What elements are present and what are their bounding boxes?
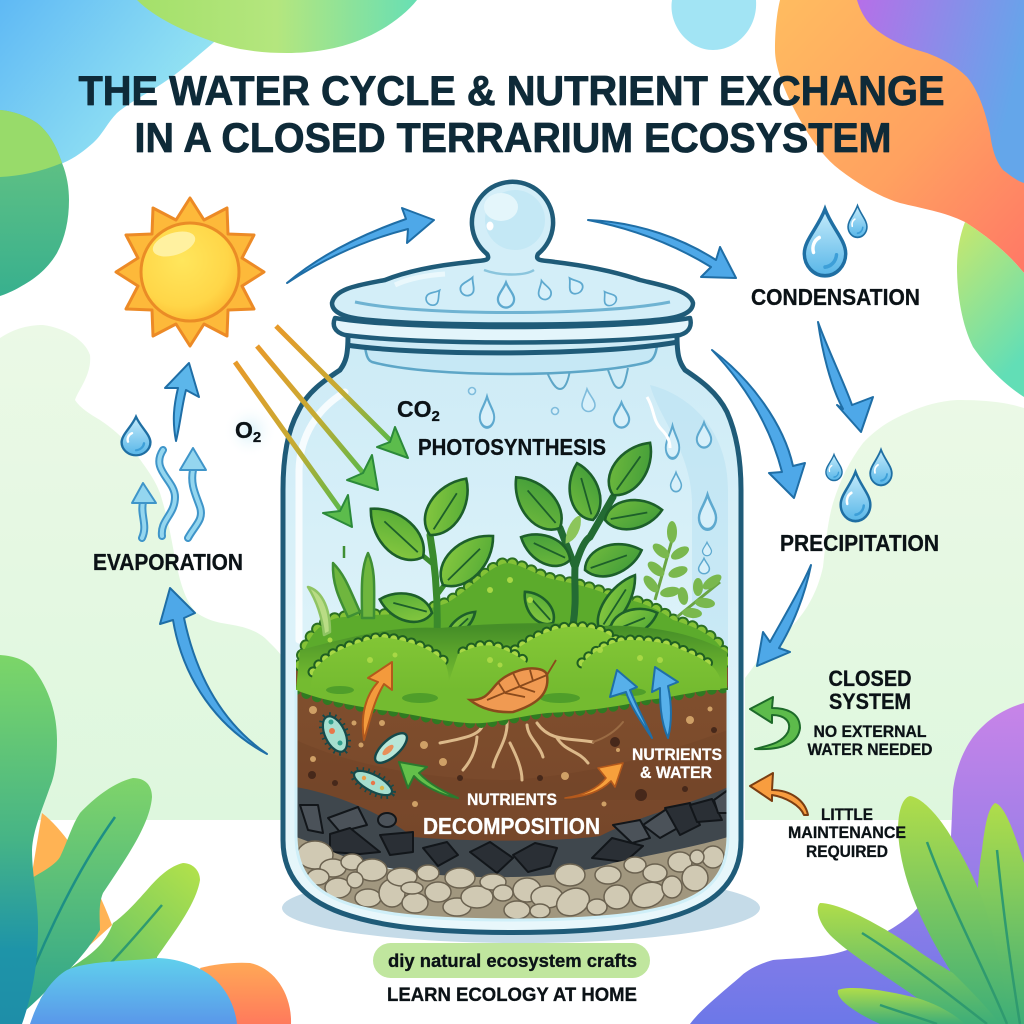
blob: top small cyan	[671, 0, 756, 50]
moss base	[296, 623, 727, 723]
moss lump left	[308, 632, 449, 678]
plant: fern	[641, 521, 724, 619]
microbe b	[370, 728, 412, 768]
blob: left green	[0, 110, 69, 296]
callout: little maintenance: MAINTENANCE	[788, 823, 906, 842]
moss lower texture	[326, 686, 646, 703]
drips under rim	[546, 368, 628, 389]
label: CO2: 2	[432, 408, 440, 425]
lid band	[334, 318, 691, 342]
arrow: little maintenance	[750, 773, 808, 815]
callout: little maintenance: LITTLE	[821, 805, 873, 824]
terrarium jar	[283, 182, 741, 932]
plant: grasses left	[308, 546, 374, 635]
callout: closed system: SYSTEM	[829, 689, 911, 714]
blob: right green	[957, 222, 1024, 397]
moss front	[296, 577, 728, 723]
arrow: blue nutrients up right	[652, 667, 678, 738]
label: photosynthesis: PHOTOSYNTHESIS	[418, 434, 606, 460]
label: decomposition: DECOMPOSITION	[423, 813, 600, 839]
blob: bottom left orange	[30, 813, 112, 945]
halo: O2	[223, 404, 277, 458]
callout: closed system: CLOSED	[828, 666, 912, 691]
arrow: orange to nutrients	[565, 763, 623, 798]
moss rear bumps dark	[300, 563, 727, 665]
callout: little maintenance: REQUIRED	[806, 842, 888, 861]
plant: left seedling	[358, 469, 504, 641]
panel: pale green right	[745, 400, 1024, 820]
arrow: precipitation to jar	[757, 565, 811, 666]
title	[78, 67, 944, 161]
roots	[440, 722, 623, 780]
lid drops	[424, 286, 444, 308]
moss rear bumps light	[300, 563, 727, 665]
charcoal chunks	[300, 790, 728, 873]
arrow: closed system loop	[750, 697, 800, 749]
arrow: sunlight 3	[235, 362, 352, 527]
blob: top left blue	[0, 0, 245, 185]
jar outline	[283, 335, 741, 932]
label: nutrients and water: NUTRIENTS	[632, 745, 722, 764]
jar shadow	[282, 873, 760, 943]
moss lump right middle	[510, 621, 620, 676]
jar body glass	[283, 335, 741, 932]
jar contents	[296, 563, 728, 925]
microbes	[317, 711, 412, 801]
soil layer	[296, 660, 728, 850]
plant: right sapling	[503, 433, 664, 643]
soil dark patch	[296, 730, 728, 800]
knob shine	[485, 190, 545, 250]
fallen leaf	[470, 660, 556, 712]
arrow: orange up	[363, 662, 392, 740]
jar inner base rim	[296, 690, 728, 920]
microbe a	[317, 711, 353, 757]
label: nutrients and water	[632, 745, 722, 782]
moss base underside	[296, 688, 728, 723]
title: IN A CLOSED TERRARIUM ECOSYSTEM	[134, 114, 892, 161]
label: precipitation: PRECIPITATION	[780, 530, 939, 556]
gravel bed	[296, 837, 728, 925]
moss highlights	[328, 577, 663, 668]
lid inner lines	[355, 302, 670, 312]
blob: bottom right purple	[690, 703, 1024, 1024]
icon: sun	[116, 198, 264, 346]
footer pill	[373, 943, 650, 978]
lid	[332, 182, 693, 342]
callout: closed system	[808, 666, 932, 759]
jar inner droplets	[468, 388, 716, 574]
icon: vapour arrows	[132, 448, 206, 538]
blob: top right orange	[775, 0, 1024, 273]
arrow: sun to lid	[287, 208, 434, 283]
moss lump far right	[580, 640, 721, 690]
label: evaporation: EVAPORATION	[93, 549, 243, 575]
label: CO2: CO	[397, 396, 432, 422]
arrow: green to microbes	[399, 762, 458, 798]
charcoal band	[296, 787, 728, 880]
moss rear	[305, 563, 722, 649]
plant: bottom right leaves	[818, 796, 1024, 1024]
blob: top centre green	[137, 0, 417, 53]
blob: bottom left teal leaf	[0, 655, 57, 1024]
lid dome and knob	[332, 182, 693, 324]
icon: condensation drops	[804, 206, 867, 276]
callout: little maintenance	[788, 805, 906, 861]
label: nutrients and water: & WATER	[640, 763, 712, 782]
footer text: LEARN ECOLOGY AT HOME	[387, 985, 637, 1006]
arrow: lid to condensation	[588, 220, 736, 278]
arrow: jar to precipitation	[712, 350, 805, 498]
arrow: evaporation to sun	[165, 363, 199, 441]
callout: closed system: WATER NEEDED	[808, 740, 932, 759]
jar rim	[346, 342, 678, 353]
glass left highlight	[299, 392, 345, 640]
moss lump centre	[452, 640, 528, 676]
blob: bottom orange	[200, 963, 291, 1024]
blob: bottom blue	[30, 958, 237, 1024]
glass right shade	[650, 385, 728, 660]
label: condensation: CONDENSATION	[751, 284, 920, 310]
arrow: blue nutrients up left	[610, 670, 652, 738]
icon: evaporation drop	[122, 417, 150, 455]
arrow: jar to evaporation	[160, 588, 267, 754]
footer pill: diy natural ecosystem crafts	[388, 951, 637, 971]
callout: closed system: NO EXTERNAL	[814, 722, 926, 741]
plant leaf: bottom left mid	[10, 778, 152, 1024]
arrow: sunlight 2	[257, 346, 378, 490]
title: THE WATER CYCLE & NUTRIENT EXCHANGE	[78, 67, 944, 114]
microbe c	[349, 765, 397, 801]
arrow: sunlight 1	[276, 326, 408, 458]
blob: top right purple	[857, 0, 1024, 183]
plant leaf: bottom left small	[40, 863, 200, 1000]
icon: precipitation drops	[826, 450, 892, 521]
soil specks	[308, 706, 717, 807]
label: nutrients: NUTRIENTS	[467, 790, 557, 809]
label: O2: O	[235, 417, 253, 443]
panel: pale green left	[0, 325, 286, 820]
arrow: condensation down	[818, 322, 873, 432]
jar neck ledge	[365, 345, 657, 374]
label: O2: 2	[253, 429, 261, 446]
